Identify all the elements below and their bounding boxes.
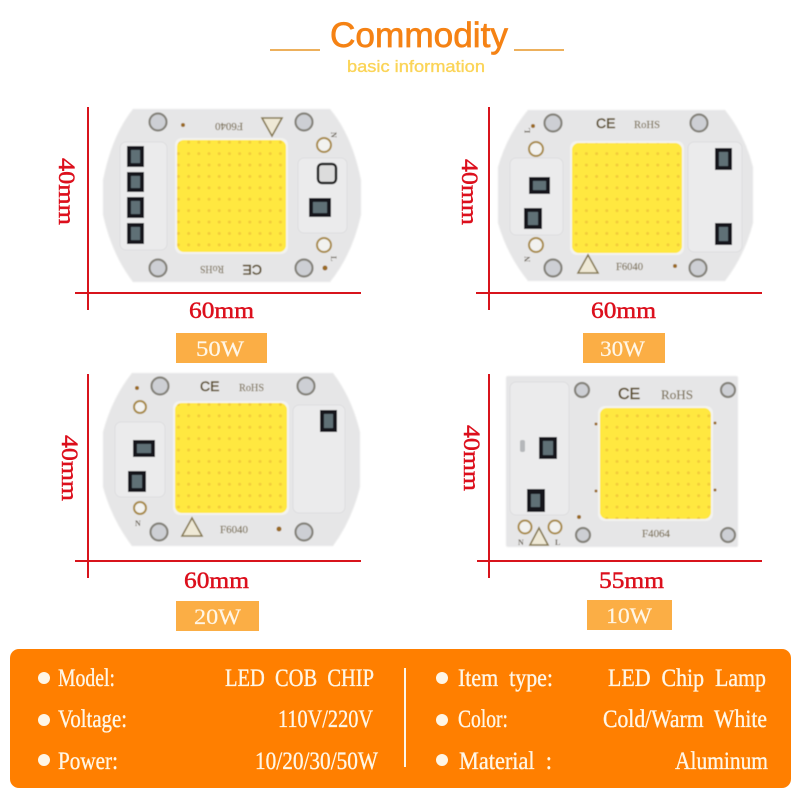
power tag 20W: 20W: [194, 604, 241, 629]
spec row: material: [436, 748, 768, 775]
dimension lines 10W: [477, 374, 762, 578]
chip board 30W: [498, 110, 753, 281]
chip board 10W: N: [518, 538, 524, 547]
dimension lines 30W: [476, 107, 762, 310]
title rule right: [514, 49, 564, 51]
chip board 20W: [103, 373, 360, 546]
chip board 50W: N: [329, 132, 338, 138]
spec row: item type: [436, 665, 766, 692]
panel: 10W chip: [459, 374, 762, 630]
chip board 50W: [103, 109, 361, 282]
chip board 20W: N: [135, 519, 141, 528]
spec row: color: Color:: [458, 706, 508, 733]
chip board 50W: RoHS: [200, 263, 224, 274]
power tag 30W: [583, 333, 665, 363]
panel: 50W chip: [54, 107, 361, 363]
chip board 20W: F6040: [220, 525, 248, 536]
chip board 10W: RoHS: [661, 387, 693, 402]
panel: 20W chip: [57, 373, 361, 631]
panel: 30W chip: [457, 107, 762, 363]
title: Commodity: [330, 16, 509, 55]
chip board 30W: F6040: [616, 262, 643, 273]
chip board 10W: L: [555, 538, 560, 547]
column divider: [404, 668, 406, 767]
width label 60mm: 60mm: [591, 298, 656, 323]
panel background: [10, 649, 791, 788]
chip board 30W: RoHS: [634, 120, 660, 131]
power tag 10W: 10W: [606, 603, 652, 628]
chip board 10W: CE: [618, 386, 640, 403]
subtitle: basic information: [347, 57, 485, 76]
panel: specifications: [10, 649, 791, 788]
spec row: power: Power:: [58, 748, 118, 775]
width label 60mm: 60mm: [184, 568, 249, 593]
chip board 30W: L: [523, 128, 532, 133]
spec row: model: [38, 665, 374, 692]
chip board 50W: F6040: [215, 120, 243, 131]
power tag 10W: [587, 600, 672, 630]
chip board 50W: L: [329, 256, 338, 261]
power tag 30W: 30W: [600, 336, 645, 361]
spec row: item type: LED Chip Lamp: [608, 665, 766, 692]
chip board 20W: CE: [200, 378, 219, 394]
chip board 10W: F4064: [642, 529, 670, 540]
title rule left: [270, 49, 320, 51]
spec row: power: 10/20/30/50W: [255, 748, 378, 775]
spec row: power: [38, 748, 378, 775]
chip board 30W: N: [523, 256, 532, 262]
spec row: item type: Item type:: [458, 665, 553, 692]
height label 40mm: 40mm: [457, 159, 482, 225]
width label 55mm: 55mm: [599, 568, 664, 593]
height label 40mm: 40mm: [54, 158, 79, 225]
width label 60mm: 60mm: [189, 298, 254, 323]
spec row: color: Cold/Warm White: [603, 706, 767, 733]
chip board 10W: [506, 376, 738, 547]
spec row: model: LED COB CHIP: [225, 665, 374, 692]
spec row: material: Material :: [459, 748, 552, 775]
power tag 20W: [176, 601, 259, 631]
spec row: color: [436, 706, 767, 733]
spec row: model: Model:: [58, 665, 115, 692]
dimension lines 20W: [75, 374, 361, 578]
chip board 50W: CE: [243, 262, 262, 278]
dimension lines 50W: [75, 107, 361, 310]
height label 40mm: 40mm: [459, 425, 484, 491]
spec row: material: Aluminum: [675, 748, 768, 775]
power tag 50W: 50W: [196, 336, 244, 361]
power tag 50W: [176, 333, 267, 363]
spec row: voltage: 110V/220V: [278, 706, 373, 733]
height label 40mm: 40mm: [57, 435, 82, 501]
chip board 20W: RoHS: [239, 383, 264, 394]
spec row: voltage: Voltage:: [58, 706, 127, 733]
spec row: voltage: [38, 706, 373, 733]
chip board 30W: CE: [596, 115, 615, 131]
